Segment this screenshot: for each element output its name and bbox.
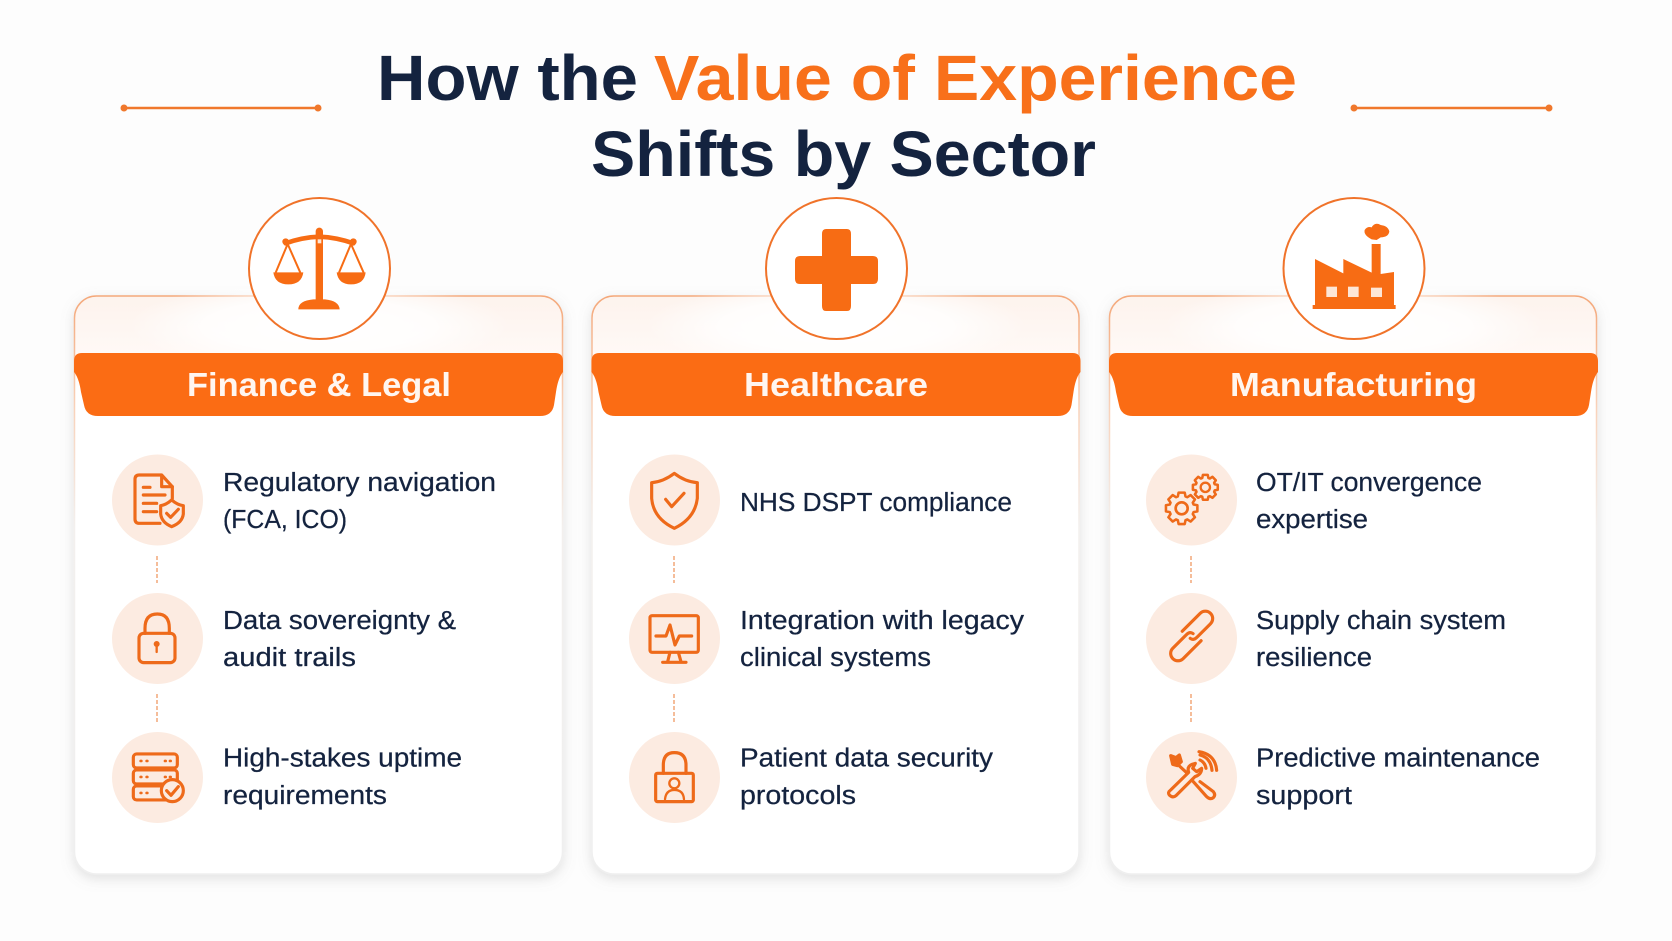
item: uptime: High-stakes uptime xyxy=(223,744,462,772)
item: OT/IT convergence: OT/IT convergence xyxy=(1256,469,1482,497)
title line 2: Shifts by Sector xyxy=(591,118,1096,190)
item: data sovereignty: audit trails xyxy=(223,644,356,672)
title highlight: Value of Experience xyxy=(654,42,1297,114)
item: predictive maintenance xyxy=(1146,732,1540,823)
sector icon: scales of justice xyxy=(249,198,390,339)
item: supply chain: Supply chain system xyxy=(1256,607,1506,635)
card background xyxy=(1110,296,1596,874)
item: OT/IT convergence: expertise xyxy=(1256,506,1368,534)
item: patient data: Patient data security xyxy=(740,744,993,772)
banner heading: Finance & Legal xyxy=(187,366,451,403)
panel: Healthcare xyxy=(592,198,1080,874)
panel: Manufacturing xyxy=(1109,198,1598,874)
sector icon: medical cross xyxy=(766,198,907,339)
banner heading: Manufacturing xyxy=(1230,366,1477,403)
card background xyxy=(74,296,562,874)
item: legacy integration: Integration with legacy xyxy=(740,607,1024,635)
item: data sovereignty: Data sovereignty & xyxy=(223,607,456,635)
title xyxy=(377,42,1297,190)
banner xyxy=(1109,353,1598,416)
item: regulatory navigation: Regulatory navigation xyxy=(223,469,496,497)
card background xyxy=(592,296,1079,874)
panel: Finance & Legal xyxy=(74,198,563,874)
sector icon: factory xyxy=(1284,198,1424,339)
item: legacy integration: clinical systems xyxy=(740,644,931,672)
item: supply chain: resilience xyxy=(1256,644,1372,672)
banner xyxy=(74,353,563,416)
item: uptime: requirements xyxy=(223,782,387,810)
item: patient data: protocols xyxy=(740,782,856,810)
left title ornament xyxy=(121,105,321,111)
item: predictive maintenance: support xyxy=(1256,782,1352,810)
banner xyxy=(592,353,1080,416)
title line 1: How the xyxy=(377,42,638,114)
item: supply chain xyxy=(1146,593,1506,684)
item: uptime xyxy=(112,732,462,823)
item: regulatory navigation xyxy=(112,454,496,546)
item: NHS DSPT: NHS DSPT compliance xyxy=(740,489,1012,517)
item: legacy integration xyxy=(629,593,1024,684)
item: OT/IT convergence xyxy=(1146,454,1482,546)
item: NHS DSPT xyxy=(629,454,1012,546)
item: predictive maintenance: Predictive maintenance xyxy=(1256,744,1540,772)
right title ornament xyxy=(1351,105,1552,111)
item: data sovereignty xyxy=(112,593,456,684)
item: regulatory navigation: (FCA, ICO) xyxy=(223,506,347,534)
banner heading: Healthcare xyxy=(744,366,928,403)
item: patient data xyxy=(629,732,993,823)
